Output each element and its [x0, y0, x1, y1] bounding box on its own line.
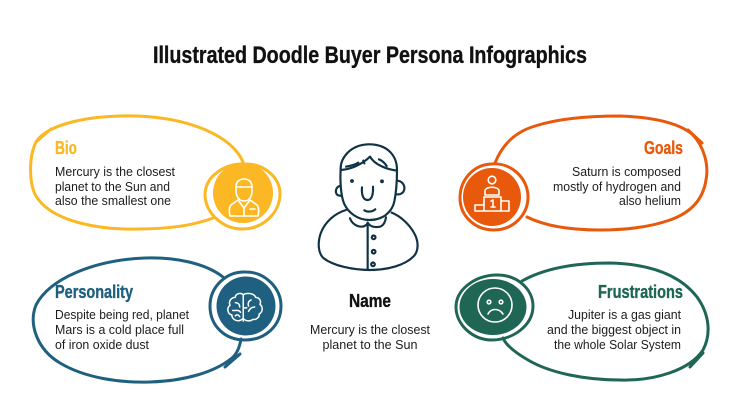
goals text: mostly of hydrogen and	[553, 180, 681, 194]
personality text: Despite being red, planet	[55, 308, 189, 322]
frustrations icon badge	[456, 275, 533, 340]
bio heading: Bio	[55, 138, 77, 158]
center description	[310, 323, 430, 352]
bio icon badge	[205, 163, 280, 229]
goals icon badge	[460, 164, 528, 230]
icon: businessman	[229, 179, 259, 216]
illustration: persona character	[319, 144, 418, 270]
goals heading: Goals	[644, 138, 683, 158]
bio text: planet to the Sun and	[55, 180, 170, 194]
goals text	[553, 165, 681, 208]
personality text: of iron oxide dust	[55, 338, 149, 352]
center description: Mercury is the closest	[310, 323, 430, 337]
panel: goals	[460, 116, 707, 230]
personality text: Mars is a cold place full	[55, 323, 184, 337]
goals text: also helium	[619, 194, 681, 208]
bio text: also the smallest one	[55, 194, 171, 208]
frustrations heading: Frustrations	[598, 282, 683, 302]
personality icon badge	[210, 272, 281, 340]
frustrations text: Jupiter is a gas giant	[568, 308, 681, 322]
frustrations text: and the biggest object in	[547, 323, 681, 337]
personality outline with arrow	[33, 258, 241, 382]
icon: brain	[228, 293, 262, 321]
goals text: Saturn is composed	[572, 165, 681, 179]
frustrations text: the whole Solar System	[554, 338, 681, 352]
frustrations text	[547, 308, 681, 352]
bio text: Mercury is the closest	[55, 165, 175, 179]
icon: sad face	[478, 288, 512, 322]
personality heading: Personality	[55, 282, 133, 302]
panel: frustrations	[456, 263, 708, 380]
bio outline with arrow	[31, 116, 243, 229]
panel: personality	[33, 258, 281, 382]
personality text	[55, 308, 189, 352]
goals outline with arrow	[495, 116, 707, 230]
center name: Name	[349, 291, 391, 311]
title: Illustrated Doodle Buyer Persona Infographics	[153, 42, 587, 69]
frustrations outline with arrow	[503, 263, 708, 380]
icon: podium	[475, 176, 509, 211]
panel: bio	[31, 116, 280, 229]
center description: planet to the Sun	[322, 338, 418, 352]
bio text	[55, 165, 175, 208]
